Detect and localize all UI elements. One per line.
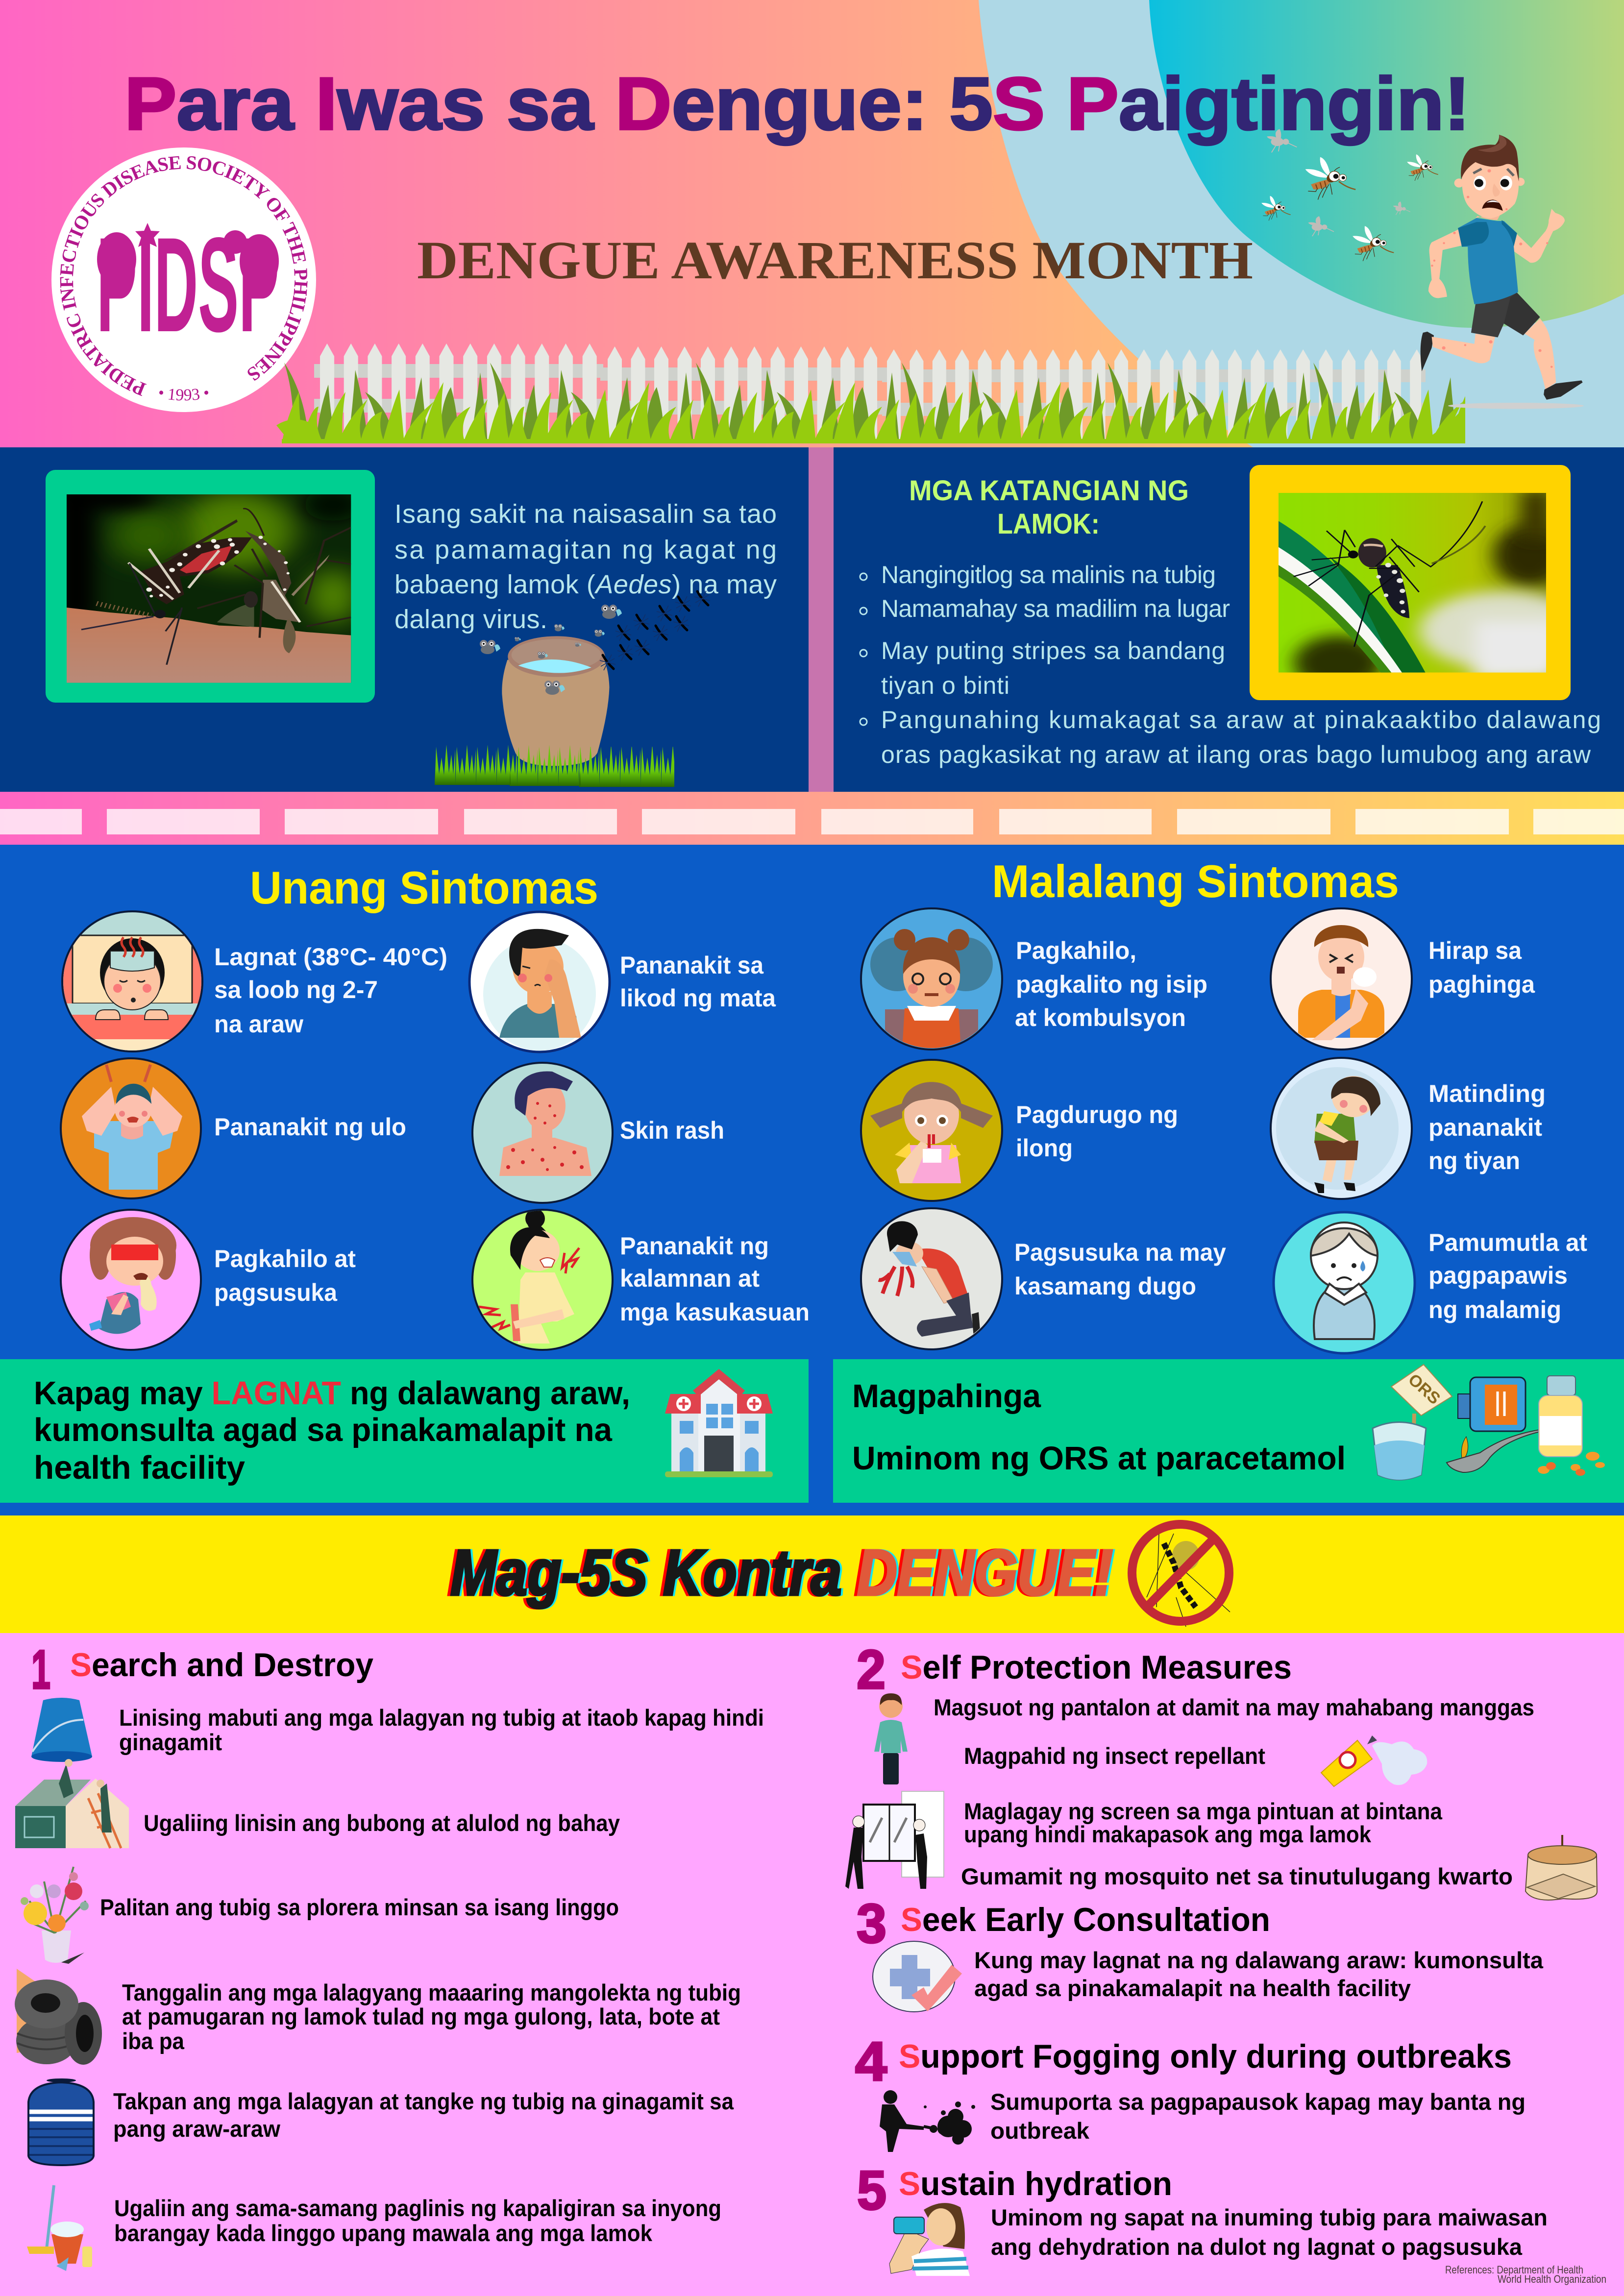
item: insect repellant: Magpahid ng insect repellant [964,1743,1265,1769]
number 4: 4 [855,2031,887,2092]
icon: girl drinking water [889,2203,970,2276]
label [1015,937,1207,1031]
logo: PIDSP seal: PEDIATRIC INFECTIOUS DISEASE SOCIETY OF THE PHILIPPINES [60,156,308,396]
label: likod ng mata [620,984,776,1012]
icon: ORS sachet and glass [1373,1365,1452,1480]
icon: syrup bottle and spoon [1447,1377,1540,1472]
symptom: fever [62,911,447,1054]
item: insect repellant [964,1735,1427,1786]
label: Matinding [1428,1080,1546,1107]
callout: rest and hydrate [833,1359,1624,1503]
label [1428,1229,1587,1323]
label [214,943,447,1038]
callout text: Kapag may LAGNAT ng dalawang araw, [34,1375,630,1412]
item: mosquito net: Gumamit ng mosquito net sa tinutulugang kwarto [961,1863,1513,1889]
step 1: search and destroy [15,1639,764,2271]
icon: person vomiting blood [861,1208,1002,1349]
item: long clothes: Magsuot ng pantalon at damit na may mahabang manggas [934,1694,1534,1720]
label: pagsusuka [214,1279,338,1306]
label: sa loob ng 2-7 [214,976,378,1003]
icon: paracetamol bottle [1538,1376,1605,1476]
banner: Mag-5S Kontra Dengue [0,1515,1624,1633]
label: Pananakit sa [620,952,764,979]
label: Pamumutla at [1428,1229,1587,1256]
step 5: sustain hydration [857,2160,1548,2276]
label: kalamnan at [620,1265,760,1292]
label: Pagkahilo, [1016,937,1136,964]
icon: running boy [1421,135,1584,409]
step 4: support fogging [855,2031,1526,2152]
label: Pagsusuka na may [1014,1239,1226,1266]
label [620,1232,810,1326]
item: clean roof and gutters [15,1759,620,1848]
decorative band [0,792,1624,845]
symptom: difficulty breathing [1271,908,1535,1050]
description text: dalang virus. [394,605,547,634]
icon: medical check [873,1941,962,2012]
bullet list: oras pagkasikat ng araw at ilang oras bago lumubog ang araw [881,741,1591,768]
grass [276,358,1465,443]
item: change vase water [21,1867,619,1964]
label: Skin rash [620,1117,724,1144]
callout text: health facility [34,1449,245,1486]
icon: girl with nosebleed [861,1060,1002,1201]
step text: agad sa pinakamalapit na health facility [974,1975,1411,2001]
label: ilong [1016,1134,1073,1162]
subtitle: DENGUE AWARENESS MONTH [417,230,1253,290]
label: pananakit [1428,1114,1542,1141]
step text [991,2204,1548,2260]
label: kasamang dugo [1014,1272,1196,1300]
step heading: Search and Destroy [70,1646,373,1684]
symptom: nausea and vomiting [61,1210,356,1350]
icon: child holding head [61,1058,201,1198]
logo: PIDSP seal: • 1993 • [159,389,208,401]
references: World Health Organization [1498,2273,1606,2285]
heading: severe symptoms: Malalang Sintomas [992,855,1399,907]
item: clean containers [31,1698,764,1762]
icon: person short of breath [1271,908,1412,1050]
label [1428,1080,1546,1174]
label: Lagnat (38°C- 40°C) [214,943,447,971]
label: Pagdurugo ng [1016,1101,1178,1128]
description text [394,499,777,634]
step text [990,2089,1526,2144]
symptom: skin rash [472,1063,724,1203]
icon: woman with joint pain [472,1209,613,1350]
icon: child with fever in bed [62,911,202,1054]
label: Pagkahilo at [214,1245,356,1272]
step heading: Support Fogging only during outbreaks [899,2038,1512,2075]
banner heading: Mag-5S Kontra DENGUE! [450,1537,1113,1609]
label [620,952,776,1012]
panel: 5S steps background [0,1633,1624,2296]
panel: symptoms background [0,845,1624,1515]
panel: what dengue is [0,447,809,792]
label: at kombulsyon [1015,1004,1186,1031]
bullet list [860,561,1601,768]
bullet list: Namamahay sa madilim na lugar [881,595,1230,622]
label: Pananakit ng [620,1232,769,1260]
step heading: Seek Early Consultation [901,1901,1270,1938]
icon: mosquitoes swarm [1261,129,1438,261]
item: cover water tanks [28,2078,734,2165]
symptom: muscle and joint pain [472,1209,810,1350]
item: clean roof and gutters: Ugaliing linisin ang bubong at alulod ng bahay [144,1810,620,1836]
title: Para Iwas sa Dengue: 5S Paigtingin! [124,62,1470,146]
icon: dizzy girl [861,908,1002,1050]
step text: ang dehydration na dulot ng lagnat o pagsusuka [991,2234,1523,2260]
heading: first symptoms: Unang Sintomas [250,862,598,913]
label: na araw [214,1010,303,1038]
label: pagkalito ng isip [1016,971,1207,998]
item: window screens [845,1791,1443,1889]
icon: hospital [665,1369,773,1477]
item: remove tires and containers: iba pa [122,2028,185,2054]
description text: Isang sakit na naisasalin sa tao [394,499,777,529]
callout text: Magpahinga [852,1378,1041,1415]
item: cover water tanks: pang araw-araw [113,2116,280,2142]
number 3: 3 [857,1893,886,1954]
label [214,1245,356,1306]
step text [974,1947,1544,2001]
label: ng tiyan [1428,1147,1520,1174]
references: References: Department of Health [1445,2264,1583,2276]
item: window screens: Maglagay ng screen sa mga pintuan at bintana [964,1798,1443,1824]
item: community clean-up: barangay kada linggo upang mawala ang mga lamok [114,2220,653,2246]
label: ng malamig [1428,1296,1561,1323]
step text: Kung may lagnat na ng dalawang araw: kumonsulta [974,1947,1544,1973]
callout text [34,1375,630,1486]
step 3: seek early consultation [857,1893,1544,2012]
item: remove tires and containers: at pamugaran ng lamok tulad ng mga gulong, lata, bote at [122,2003,720,2029]
icon: boy holding stomach [1271,1058,1412,1199]
icon: girl vomiting [61,1210,201,1350]
heading: LAMOK: [997,508,1100,540]
label: Pananakit ng ulo [214,1113,406,1141]
gradient circle [1149,0,1624,328]
description text: babaeng lamok (Aedes) na may [394,570,777,599]
step text: outbreak [990,2118,1090,2144]
heading: MGA KATANGIAN NG [909,475,1189,507]
heading [909,475,1189,540]
item: change vase water: Palitan ang tubig sa plorera minsan sa isang linggo [100,1894,619,1920]
bullet list: tiyan o binti [881,672,1009,699]
panel: header background [0,0,1624,447]
bullet list: May puting stripes sa bandang [881,637,1225,664]
step text: Sumuporta sa pagpapausok kapag may banta ng [990,2089,1526,2115]
label: mga kasukasuan [620,1298,810,1326]
callout text: Uminom ng ORS at paracetamol [852,1440,1346,1477]
item: community clean-up: Ugaliin ang sama-samang paglinis ng kapaligiran sa inyong [114,2195,721,2221]
callout: consult when fever persists [0,1359,809,1503]
icon: person rubbing eye [469,912,610,1052]
divider: pink bar [809,447,834,792]
callout text [852,1378,1346,1477]
label: paghinga [1428,971,1535,998]
icon: ORS sachet and glass: ORS [1404,1370,1444,1408]
light blue curved shape [979,0,1624,447]
symptom: vomiting blood [861,1208,1226,1349]
number 5: 5 [857,2160,886,2221]
icon: fogging machine [880,2090,975,2152]
step heading: Sustain hydration [899,2165,1172,2202]
icon: no mosquito sign [1132,1524,1230,1627]
step 2: self protection [845,1639,1597,1900]
item: long clothes [874,1693,1534,1784]
logo: PIDSP seal: PIDSP [97,210,279,360]
label [1428,937,1535,998]
panel: mosquito characteristics [834,447,1624,792]
callout text: kumonsulta agad sa pinakamalapit na [34,1412,613,1448]
references [1445,2264,1606,2285]
icon: pale boy [1274,1212,1415,1353]
step heading: Self Protection Measures [901,1649,1292,1686]
symptom: pale and cold sweat [1274,1212,1587,1353]
symptom: headache [61,1058,406,1198]
symptom: dizziness and convulsions [861,908,1207,1050]
label [1014,1239,1226,1300]
number 2: 2 [857,1639,886,1700]
label [1016,1101,1178,1162]
number 1: 1 [31,1639,50,1700]
item: mosquito net [961,1835,1597,1900]
item: clean containers: ginagamit [119,1729,222,1755]
icon: water container with mosquitoes [435,591,710,787]
item: window screens: upang hindi makapasok ang mga lamok [964,1821,1372,1847]
item: cover water tanks: Takpan ang mga lalagyan at tangke ng tubig na ginagamit sa [113,2088,734,2114]
label: pagpapawis [1428,1262,1568,1289]
symptom: eye pain [469,912,776,1052]
bullet list: Pangunahing kumakagat sa araw at pinakaaktibo dalawang [881,706,1601,733]
item: clean containers: Linising mabuti ang mga lalagyan ng tubig at itaob kapag hindi [119,1705,764,1731]
label: Hirap sa [1428,937,1522,964]
item: remove tires and containers: Tanggalin ang mga lalagyang maaaring mangolekta ng tubig [122,1979,741,2005]
symptom: severe stomach pain [1271,1058,1546,1199]
photo: mosquito biting skin [46,470,375,703]
item: community clean-up [27,2185,721,2271]
fence [314,343,1426,442]
icon: person with red rash [472,1063,613,1203]
step text: Uminom ng sapat na inuming tubig para maiwasan [991,2204,1548,2230]
photo: mosquito on leaf [1250,465,1589,700]
bullet list: Nangingitlog sa malinis na tubig [881,561,1216,588]
symptom: nosebleed [861,1060,1178,1201]
item: remove tires and containers [15,1969,741,2065]
description text: sa pamamagitan ng kagat ng [394,535,777,564]
